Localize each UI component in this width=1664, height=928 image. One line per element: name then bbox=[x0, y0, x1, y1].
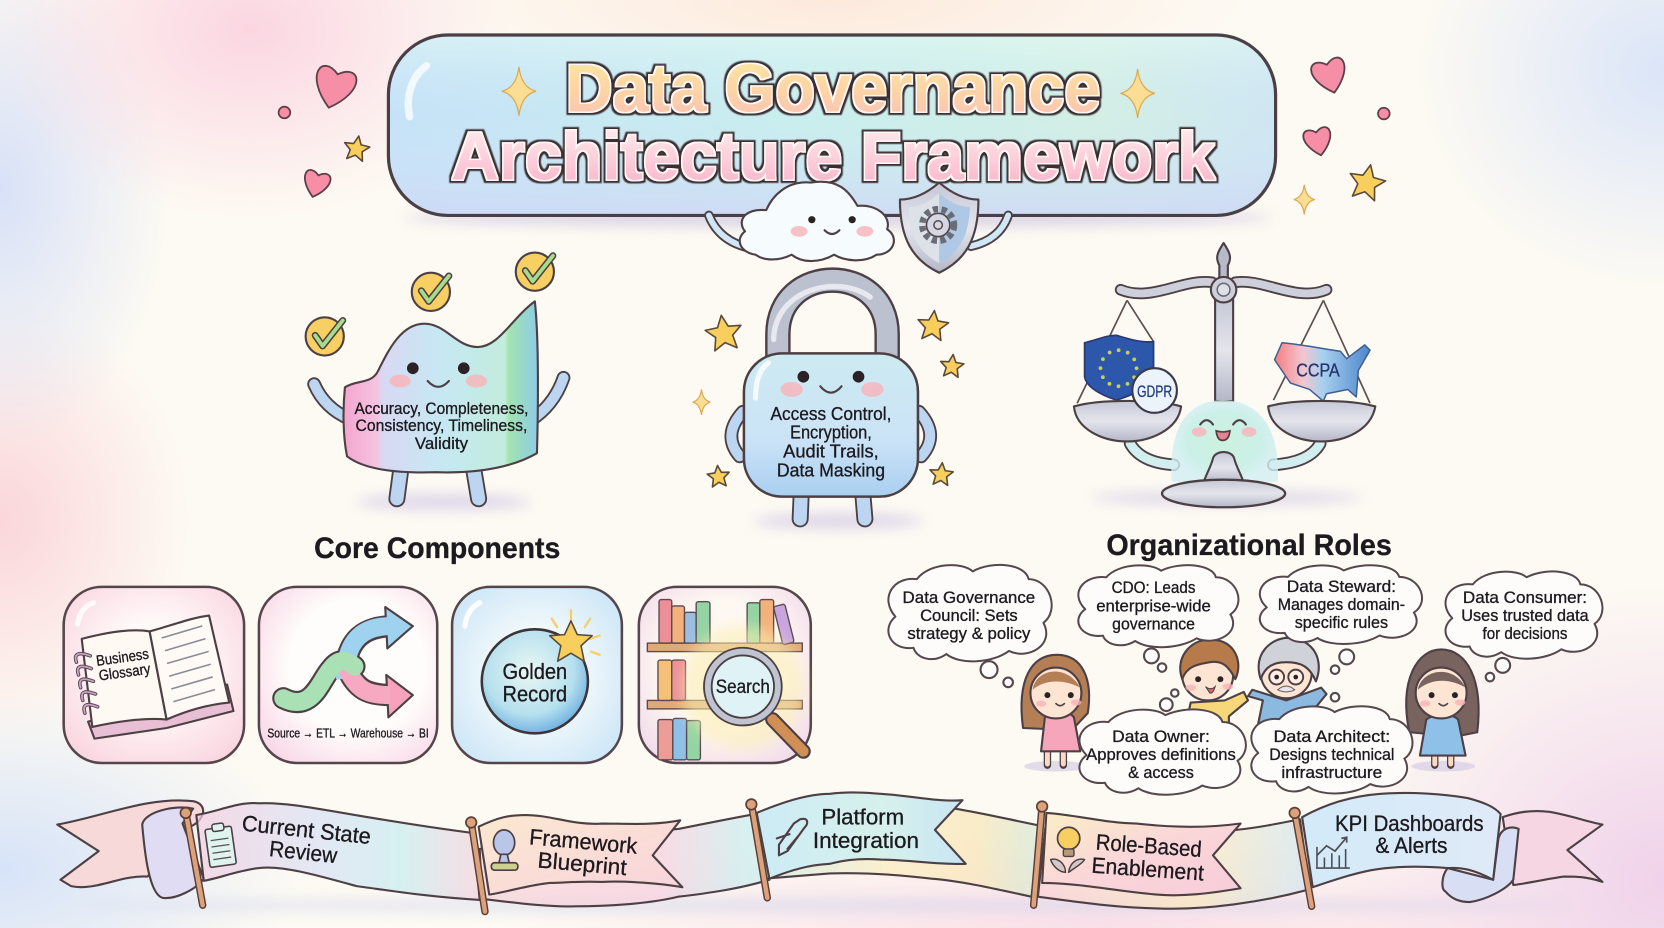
bubble: data steward: specific rules bbox=[1295, 614, 1388, 632]
data quality mascot bbox=[306, 253, 564, 510]
cloud and shield mascot bbox=[709, 182, 1008, 273]
character: data owner boy bbox=[1180, 640, 1248, 732]
title line 2: Architecture Framework bbox=[451, 119, 1215, 194]
roles: thought bubbles dots bbox=[981, 648, 1510, 711]
CCPA map bbox=[1275, 343, 1370, 401]
icon: KPI chart bbox=[1316, 837, 1350, 868]
flag: KPI dashboards: KPI Dashboards bbox=[1335, 811, 1484, 836]
heading: core components: Core Components bbox=[314, 532, 560, 565]
icon: lightbulb and leaves bbox=[1051, 827, 1085, 872]
bubble: data governance council: strategy & policy bbox=[907, 625, 1031, 643]
flag: current state review text and icon: Current State bbox=[241, 811, 372, 849]
bubble: data consumer: Uses trusted data bbox=[1461, 607, 1590, 625]
flag: platform integration: Platform bbox=[821, 805, 904, 830]
title pill bbox=[388, 35, 1276, 215]
scale mascot face bbox=[1192, 420, 1256, 440]
juggled checkmarks bbox=[306, 253, 554, 356]
padlock stars bbox=[693, 309, 965, 487]
bubble: data governance council bbox=[888, 565, 1052, 661]
ribbon curl left bbox=[142, 807, 204, 898]
roadmap ribbon bbox=[57, 792, 1602, 913]
title sparkle left bbox=[502, 67, 536, 116]
golden record label: Golden bbox=[502, 659, 567, 684]
quality text: Validity bbox=[415, 435, 469, 453]
bubble: data owner: & access bbox=[1128, 764, 1194, 782]
ribbon tail left bbox=[57, 800, 203, 887]
CCPA map: CCPA bbox=[1296, 361, 1340, 381]
flag: role-based enablement bbox=[1042, 813, 1241, 895]
cloud bbox=[740, 182, 894, 261]
left pan bbox=[1074, 401, 1181, 441]
title banner bbox=[388, 35, 1276, 227]
compliance scale bbox=[1074, 243, 1375, 507]
card: search catalog bbox=[639, 587, 811, 763]
heading: organizational roles: Organizational Roles bbox=[1106, 529, 1392, 562]
GDPR shield bbox=[1085, 335, 1154, 400]
icon: integration tools bbox=[777, 819, 807, 855]
lineage label: Source → ETL → Warehouse → BI bbox=[267, 726, 429, 741]
ribbon segment two bbox=[480, 814, 769, 906]
bubble: CDO bbox=[1078, 565, 1238, 647]
bubble: data steward: Manages domain- bbox=[1278, 596, 1405, 614]
bubble: data architect: Data Architect: bbox=[1273, 728, 1390, 746]
flag: KPI dashboards: & Alerts bbox=[1375, 833, 1448, 858]
flag: role-based enablement: Role-Based bbox=[1095, 830, 1203, 862]
book label bbox=[95, 647, 152, 685]
character: steward elder bbox=[1248, 638, 1327, 732]
right pan bbox=[1268, 401, 1375, 441]
bubble: data architect: infrastructure bbox=[1281, 764, 1382, 782]
book label: Glossary bbox=[98, 661, 152, 685]
title line 1: Data Governance bbox=[566, 51, 1100, 126]
magnifying glass bbox=[681, 626, 804, 751]
card: data lineage bbox=[259, 587, 437, 763]
lineage arrows bbox=[283, 607, 413, 717]
shield bbox=[900, 183, 978, 273]
security text: Encryption, bbox=[790, 421, 872, 442]
scale base bbox=[1162, 452, 1285, 507]
flag: framework: Framework bbox=[528, 824, 639, 859]
flag: role-based enablement: Enablement bbox=[1091, 853, 1205, 886]
scale strings bbox=[1077, 300, 1370, 403]
mascot body bbox=[344, 301, 538, 472]
bubble: data owner bbox=[1079, 709, 1246, 795]
flag: current state review text and icon: Review bbox=[268, 836, 339, 868]
decorative hearts and stars right bbox=[1294, 56, 1390, 214]
golden record label bbox=[502, 659, 567, 706]
bubble: data governance council: Data Governance bbox=[903, 589, 1035, 607]
scale column bbox=[1215, 243, 1233, 401]
flag: framework: Blueprint bbox=[537, 847, 629, 880]
security text: Audit Trails, bbox=[783, 440, 879, 461]
book icon bbox=[76, 616, 233, 739]
security text bbox=[770, 403, 891, 480]
security text: Data Masking bbox=[777, 459, 885, 480]
decorative hearts and stars left bbox=[279, 64, 371, 200]
mascot arms and legs bbox=[314, 378, 564, 499]
flag: platform integration: Integration bbox=[813, 828, 919, 853]
bookshelves bbox=[647, 600, 802, 760]
padlock shackle bbox=[774, 280, 887, 366]
GDPR badge bbox=[1132, 368, 1177, 413]
flag: KPI dashboards bbox=[1302, 793, 1501, 887]
flag: platform integration bbox=[757, 792, 966, 879]
bubble: CDO: enterprise-wide bbox=[1096, 597, 1211, 615]
bubble: data owner: Approves definitions bbox=[1086, 746, 1236, 764]
bubble: data architect bbox=[1251, 706, 1413, 793]
scale mascot body bbox=[1171, 400, 1278, 482]
bubble: data architect: Designs technical bbox=[1269, 746, 1394, 764]
star with rays bbox=[550, 610, 600, 661]
scale mascot bbox=[1130, 444, 1320, 465]
bubble: data owner: Data Owner: bbox=[1112, 728, 1210, 746]
security text: Access Control, bbox=[770, 403, 891, 424]
icon: approval stamp bbox=[491, 830, 518, 870]
bubble: data steward bbox=[1260, 565, 1422, 644]
bubble: data steward: Data Steward: bbox=[1287, 578, 1396, 596]
card: business glossary bbox=[64, 587, 244, 763]
bubble: data consumer bbox=[1445, 571, 1602, 659]
padlock body bbox=[744, 353, 918, 497]
bubble: data governance council: Council: Sets bbox=[920, 607, 1018, 625]
ribbon segment three bbox=[759, 809, 1040, 897]
GDPR badge: GDPR bbox=[1137, 383, 1172, 401]
magnifying glass: Search bbox=[716, 677, 770, 698]
quality text: Accuracy, Completeness, bbox=[354, 400, 528, 418]
bubble: CDO: governance bbox=[1112, 615, 1195, 633]
quality text bbox=[354, 400, 528, 453]
ribbon poles bbox=[180, 799, 1312, 912]
card: golden record bbox=[452, 587, 622, 763]
book label: Business bbox=[95, 647, 150, 670]
character: council girl bbox=[1022, 655, 1089, 772]
quality text: Consistency, Timeliness, bbox=[356, 417, 527, 435]
golden sphere bbox=[482, 629, 588, 733]
scale beam bbox=[1121, 277, 1327, 302]
character: consumer girl bbox=[1406, 649, 1479, 772]
flag: current state review text and icon bbox=[204, 811, 372, 868]
title sparkle right bbox=[1121, 69, 1155, 118]
padlock security mascot bbox=[693, 280, 965, 530]
ribbon segment one bbox=[196, 803, 480, 900]
ribbon segment four bbox=[1038, 819, 1310, 909]
bubble: data consumer: for decisions bbox=[1483, 625, 1567, 643]
flag: framework bbox=[479, 815, 682, 895]
padlock arms and legs bbox=[731, 412, 930, 519]
bubble: data consumer: Data Consumer: bbox=[1463, 589, 1587, 607]
icon: clipboard bbox=[204, 822, 236, 868]
bubble: CDO: CDO: Leads bbox=[1112, 579, 1195, 597]
ribbon tail right bbox=[1503, 811, 1602, 885]
golden record label: Record bbox=[502, 681, 567, 706]
ribbon curl right bbox=[1442, 827, 1519, 902]
